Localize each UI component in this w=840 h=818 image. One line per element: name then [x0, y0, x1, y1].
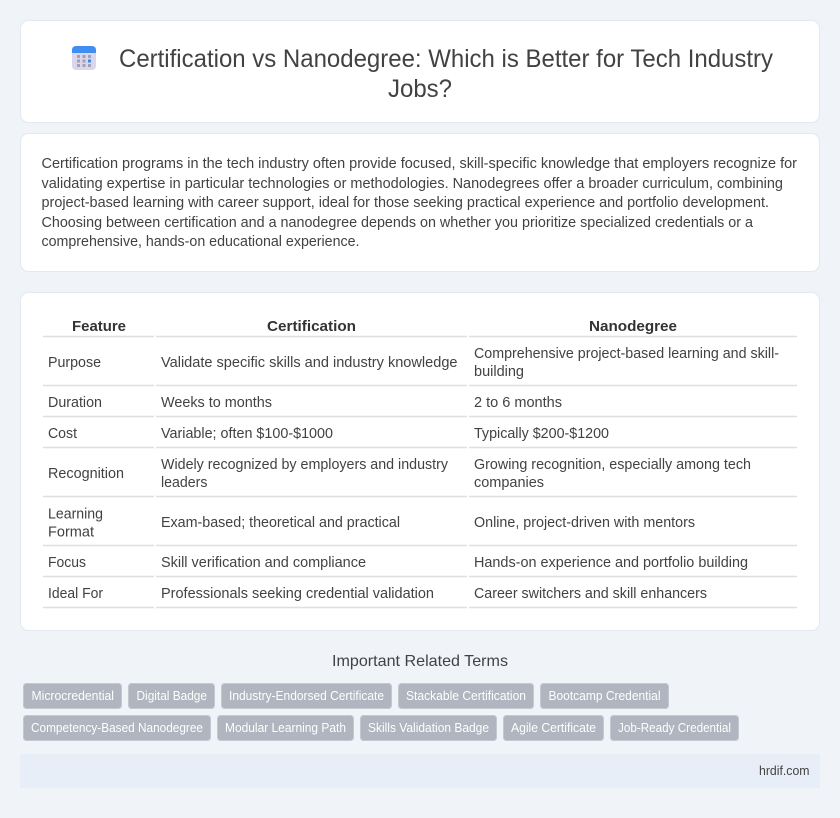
row: cost: Typically $200-$1200	[474, 426, 609, 442]
tag: Job-Ready Credential	[610, 716, 738, 740]
tag: Digital Badge: Digital Badge	[136, 689, 207, 703]
row: duration: Duration	[48, 395, 102, 411]
row: learning format: Online, project-driven with mentors	[474, 515, 695, 531]
tag: Bootcamp Credential	[540, 684, 668, 708]
row: learning format: Exam-based; theoretical and practical	[161, 515, 400, 531]
row: cost: Variable; often $100-$1000	[161, 426, 333, 442]
tag: Competency-Based Nanodegree: Competency-Based Nanodegree	[31, 721, 203, 735]
title panel	[20, 20, 820, 122]
row: ideal for: Career switchers and skill enhancers	[474, 586, 707, 602]
row: focus	[48, 555, 748, 571]
intro text: project-based learning with career support, ideal for those seeking practical experience and portfolio development.	[42, 195, 769, 211]
related terms heading: Important Related Terms	[332, 653, 508, 670]
row: ideal for: Ideal For	[48, 586, 103, 602]
row: duration: 2 to 6 months	[474, 395, 562, 411]
row: recognition: leaders	[161, 475, 208, 491]
icon: calendar	[72, 46, 96, 70]
table header	[72, 319, 677, 335]
panel: introduction	[20, 134, 820, 272]
row: purpose: building	[474, 364, 524, 380]
tag: Industry-Endorsed Certificate	[222, 684, 392, 708]
row: cost	[48, 426, 609, 442]
title: Certification vs Nanodegree: Which is Better for Tech Industry	[119, 45, 773, 73]
row: learning format: Learning	[48, 506, 103, 522]
tag: Microcredential: Microcredential	[32, 689, 114, 703]
tag: Skills Validation Badge	[360, 716, 496, 740]
intro text: comprehensive, hands-on educational experience.	[42, 234, 360, 250]
intro text: validating expertise in particular technologies or methodologies. Nanodegrees offer a broader curriculum, combining	[42, 176, 783, 192]
tag: Stackable Certification: Stackable Certification	[406, 689, 526, 703]
table header: Feature	[72, 319, 126, 335]
tag: Competency-Based Nanodegree	[24, 716, 210, 740]
tag: Modular Learning Path	[218, 716, 354, 740]
footer bar: hrdif.com	[759, 764, 810, 778]
intro text	[42, 156, 797, 250]
row: focus: Skill verification and compliance	[161, 555, 366, 571]
row: duration	[48, 395, 562, 411]
tag: Microcredential	[24, 684, 122, 708]
title	[119, 45, 773, 103]
row: focus: Focus	[48, 555, 86, 571]
row: focus: Hands-on experience and portfolio building	[474, 555, 748, 571]
row: cost: Cost	[48, 426, 77, 442]
row: purpose: Comprehensive project-based learning and skill-	[474, 346, 779, 362]
footer bar	[20, 754, 820, 788]
tag: Stackable Certification	[398, 684, 534, 708]
row: ideal for	[48, 586, 707, 602]
panel: comparison table	[20, 292, 820, 630]
tag: Agile Certificate	[504, 716, 604, 740]
row: ideal for: Professionals seeking credential validation	[161, 586, 434, 602]
tag: Job-Ready Credential: Job-Ready Credential	[618, 721, 731, 735]
intro text: Choosing between certification and a nanodegree depends on whether you prioritize specialized credentials or a	[42, 215, 753, 231]
row: purpose: Purpose	[48, 355, 101, 371]
tag: Modular Learning Path: Modular Learning Path	[225, 721, 346, 735]
row: recognition: Growing recognition, especially among tech	[474, 457, 751, 473]
intro text: Certification programs in the tech industry often provide focused, skill-specific knowledge that employers recognize for	[42, 156, 797, 172]
row: recognition: companies	[474, 475, 544, 491]
tag: Agile Certificate: Agile Certificate	[511, 721, 596, 735]
row: purpose	[48, 346, 779, 380]
row: recognition: Recognition	[48, 466, 124, 482]
related term tags	[24, 684, 738, 740]
row: purpose: Validate specific skills and industry knowledge	[161, 355, 458, 371]
tag: Bootcamp Credential: Bootcamp Credential	[548, 689, 660, 703]
row: recognition	[48, 457, 751, 491]
title: Jobs?	[388, 75, 452, 103]
tag: Digital Badge	[128, 684, 214, 708]
row: learning format: Format	[48, 524, 94, 540]
tag: Industry-Endorsed Certificate: Industry-Endorsed Certificate	[229, 689, 384, 703]
row: recognition: Widely recognized by employers and industry	[161, 457, 449, 473]
row: duration: Weeks to months	[161, 395, 272, 411]
table header: Nanodegree	[589, 319, 677, 335]
tag: Skills Validation Badge: Skills Validation Badge	[368, 721, 489, 735]
row: learning format	[48, 506, 695, 540]
table header: Certification	[267, 319, 356, 335]
